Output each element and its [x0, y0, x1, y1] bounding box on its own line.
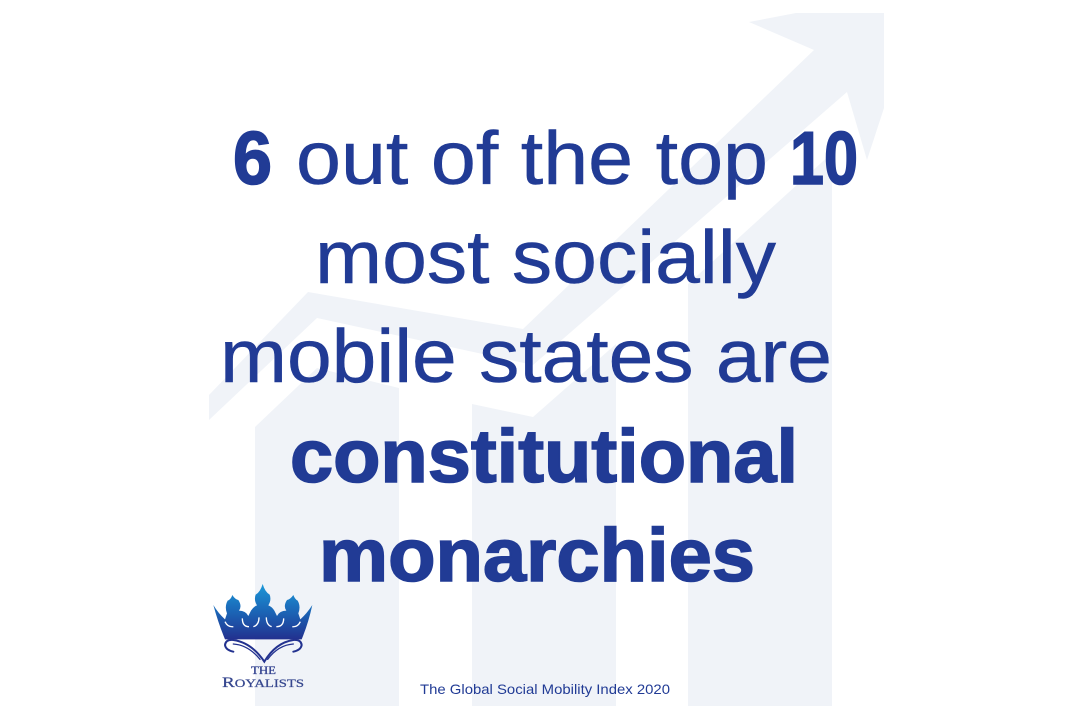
background: rising bar chart with arrow [209, 13, 884, 706]
headline line 5: monarchies [319, 513, 755, 597]
logo: The Royalists [213, 584, 312, 691]
headline line 3: mobile states are [220, 314, 832, 398]
headline line 2: most socially [315, 215, 777, 299]
icon: crown scrollwork [225, 640, 302, 662]
background bar 1 [255, 368, 399, 706]
background bar 3 [688, 153, 832, 706]
background bar 2 [472, 344, 616, 706]
icon: crown [213, 584, 312, 639]
headline text [220, 116, 858, 597]
headline line 1: 10 [790, 116, 858, 200]
headline line 1: out of the top [296, 116, 768, 200]
headline line 1: 6 [233, 116, 272, 200]
background arrow [209, 13, 884, 420]
source caption: The Global Social Mobility Index 2020 [420, 681, 670, 697]
headline line 4: constitutional [290, 414, 798, 498]
logo text: THE: THE [251, 665, 276, 677]
logo text: ROYALISTS: ROYALISTS [222, 675, 304, 691]
